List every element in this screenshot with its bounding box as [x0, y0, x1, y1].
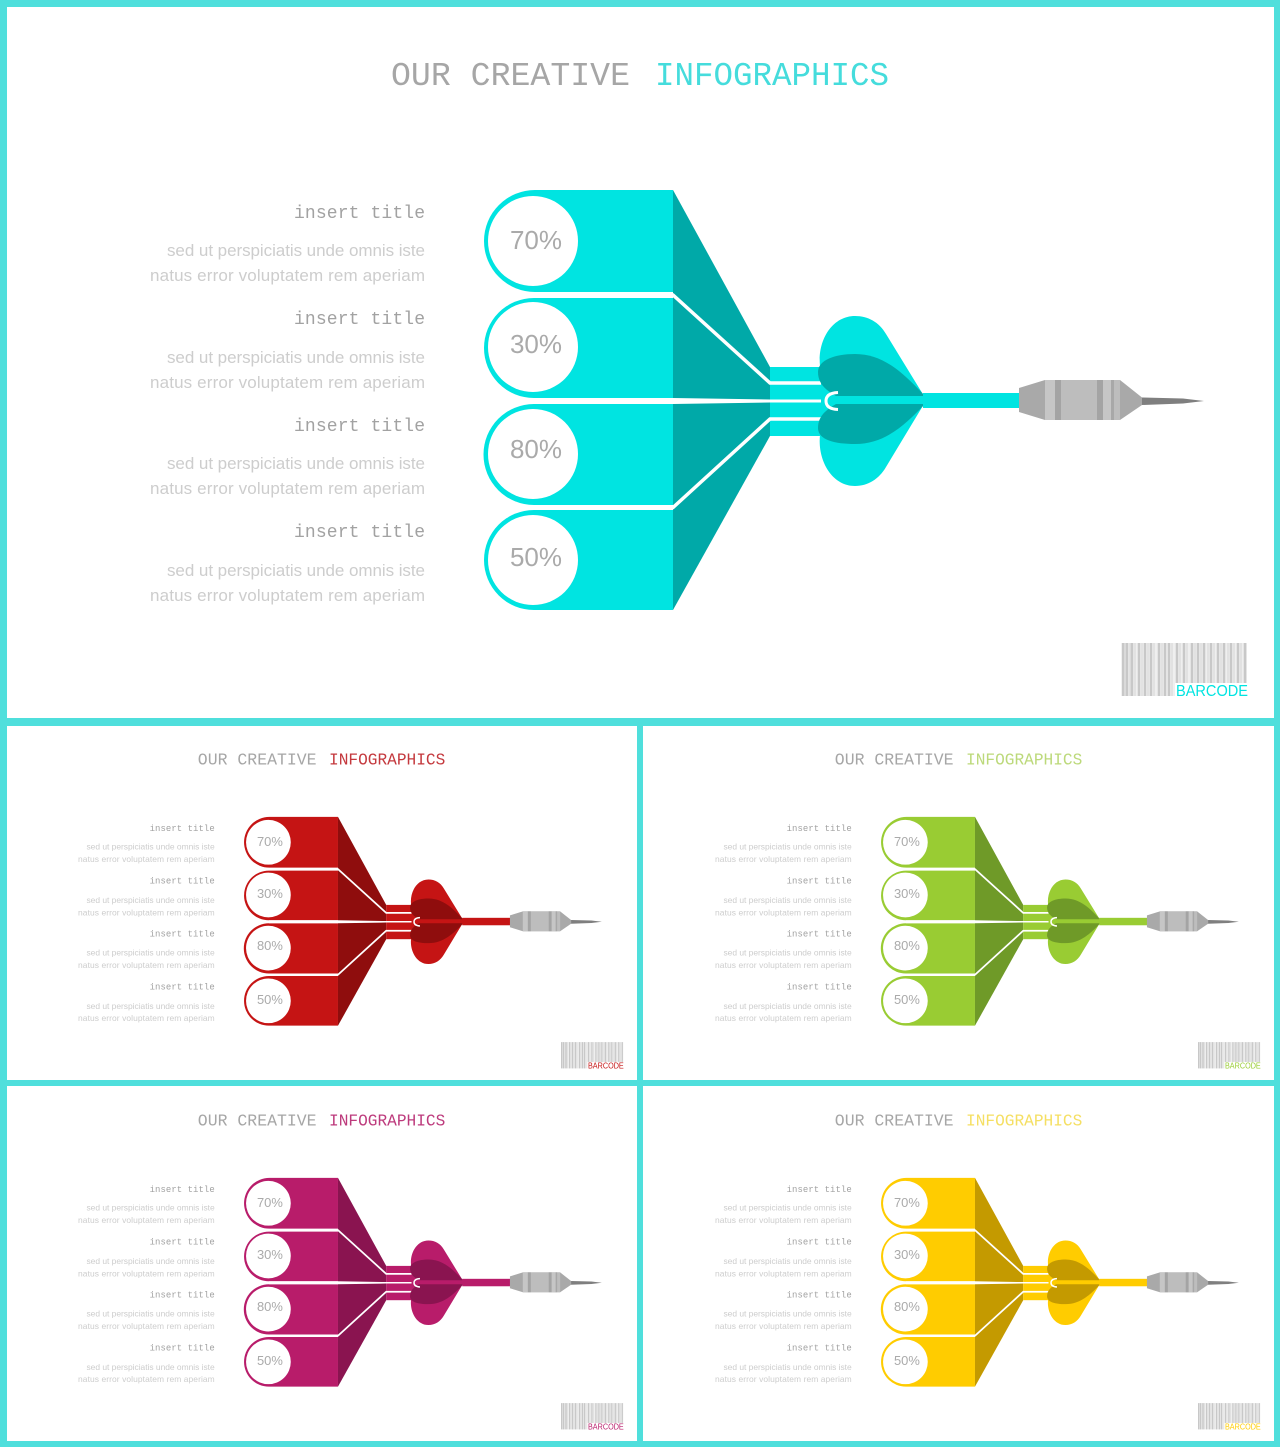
text blocks: natus error voluptatem rem aperiam — [715, 907, 852, 917]
icon: dart barrel and tip — [462, 1272, 602, 1292]
percentages: 30% — [257, 886, 283, 901]
text blocks: natus error voluptatem rem aperiam — [715, 960, 852, 970]
text blocks: natus error voluptatem rem aperiam — [715, 1215, 852, 1225]
percentages: 80% — [894, 1299, 920, 1314]
text blocks: insert title — [787, 1343, 852, 1353]
title — [198, 1112, 445, 1131]
icon: dart barrel and tip — [923, 380, 1204, 420]
text blocks — [78, 1185, 215, 1384]
title: INFOGRAPHICS — [329, 1112, 445, 1131]
icon: dart barrel and tip — [1099, 1272, 1239, 1292]
text blocks: natus error voluptatem rem aperiam — [715, 1268, 852, 1278]
percentages: 50% — [894, 1353, 920, 1368]
title: OUR CREATIVE — [391, 58, 630, 95]
panel: green slide — [643, 726, 1274, 1080]
text blocks: insert title — [787, 824, 852, 834]
text blocks: sed ut perspiciatis unde omnis iste — [86, 1001, 215, 1011]
text blocks: insert title — [787, 1185, 852, 1195]
text block 4: insert title — [294, 523, 425, 543]
four percentage pills — [244, 1178, 338, 1387]
percentages: 70% — [510, 225, 562, 255]
title — [198, 751, 445, 770]
icon: dart flights — [818, 316, 925, 486]
funnel and connector lines — [906, 1178, 1052, 1387]
icon: dart flights — [410, 1241, 463, 1325]
percentages: 50% — [257, 1353, 283, 1368]
barcode — [561, 1042, 624, 1070]
text block 1: sed ut perspiciatis unde omnis iste — [167, 241, 425, 260]
icon: dart flights — [1047, 880, 1100, 964]
icon: dart barrel and tip — [1099, 911, 1239, 931]
title — [835, 1112, 1082, 1131]
percentages — [894, 834, 920, 1007]
text blocks: insert title — [787, 930, 852, 940]
text block 1: insert title — [294, 204, 425, 224]
percentages: 70% — [894, 1195, 920, 1210]
text blocks: insert title — [150, 1238, 215, 1248]
text blocks: natus error voluptatem rem aperiam — [715, 854, 852, 864]
percentages: 50% — [510, 542, 562, 572]
text blocks: natus error voluptatem rem aperiam — [715, 1013, 852, 1023]
percentages: 80% — [510, 434, 562, 464]
percentages — [894, 1195, 920, 1368]
four percentage pills — [483, 190, 673, 610]
text blocks: insert title — [150, 1185, 215, 1195]
text blocks: sed ut perspiciatis unde omnis iste — [86, 1256, 215, 1266]
funnel and connector lines — [534, 190, 828, 610]
title: INFOGRAPHICS — [655, 58, 889, 95]
text block 2 — [150, 310, 425, 392]
text blocks: insert title — [150, 877, 215, 887]
text blocks: insert title — [787, 1291, 852, 1301]
barcode: BARCODE — [588, 1422, 624, 1431]
text block 2: sed ut perspiciatis unde omnis iste — [167, 348, 425, 367]
text block 4: sed ut perspiciatis unde omnis iste — [167, 561, 425, 580]
title: INFOGRAPHICS — [966, 1112, 1082, 1131]
text blocks: sed ut perspiciatis unde omnis iste — [723, 948, 852, 958]
text block 3 — [150, 417, 425, 498]
text blocks: sed ut perspiciatis unde omnis iste — [86, 842, 215, 852]
text block 2: natus error voluptatem rem aperiam — [150, 373, 425, 392]
percentages: 50% — [894, 992, 920, 1007]
text blocks: natus error voluptatem rem aperiam — [715, 1374, 852, 1384]
text blocks: natus error voluptatem rem aperiam — [78, 1321, 215, 1331]
title: OUR CREATIVE — [198, 751, 317, 770]
text block 1 — [150, 204, 425, 285]
text blocks: insert title — [787, 982, 852, 992]
text blocks: natus error voluptatem rem aperiam — [78, 854, 215, 864]
funnel and connector lines — [269, 817, 415, 1026]
percentages: 30% — [894, 1247, 920, 1262]
barcode: BARCODE — [1225, 1422, 1261, 1431]
title: INFOGRAPHICS — [329, 751, 445, 770]
funnel and connector lines — [269, 1178, 415, 1387]
title — [391, 58, 889, 95]
percentages: 70% — [257, 1195, 283, 1210]
text blocks — [715, 1185, 852, 1384]
text blocks: natus error voluptatem rem aperiam — [715, 1321, 852, 1331]
text block 2: insert title — [294, 310, 425, 330]
panel: red slide — [7, 726, 637, 1080]
percentages: 70% — [257, 834, 283, 849]
funnel and connector lines — [906, 817, 1052, 1026]
text blocks: sed ut perspiciatis unde omnis iste — [723, 1203, 852, 1213]
text blocks: sed ut perspiciatis unde omnis iste — [86, 1203, 215, 1213]
barcode — [1122, 643, 1249, 700]
percentages: 30% — [510, 329, 562, 359]
text blocks: sed ut perspiciatis unde omnis iste — [723, 1001, 852, 1011]
title: OUR CREATIVE — [835, 1112, 954, 1131]
text blocks — [78, 824, 215, 1023]
icon: dart flights — [1047, 1241, 1100, 1325]
panel: cyan main slide — [7, 7, 1274, 718]
text blocks: insert title — [150, 930, 215, 940]
text blocks: insert title — [150, 824, 215, 834]
text blocks: natus error voluptatem rem aperiam — [78, 1268, 215, 1278]
text blocks: sed ut perspiciatis unde omnis iste — [86, 948, 215, 958]
text block 4: natus error voluptatem rem aperiam — [150, 586, 425, 605]
text block 4 — [150, 523, 425, 605]
text blocks: sed ut perspiciatis unde omnis iste — [723, 1309, 852, 1319]
percentages: 80% — [894, 938, 920, 953]
text blocks: insert title — [150, 1343, 215, 1353]
barcode: BARCODE — [1176, 683, 1248, 700]
text blocks: natus error voluptatem rem aperiam — [78, 1374, 215, 1384]
percentages: 80% — [257, 1299, 283, 1314]
text blocks: natus error voluptatem rem aperiam — [78, 960, 215, 970]
text blocks: insert title — [150, 982, 215, 992]
text blocks: insert title — [150, 1291, 215, 1301]
text block 3: insert title — [294, 417, 425, 437]
four percentage pills — [881, 817, 975, 1026]
barcode — [1198, 1042, 1261, 1070]
text blocks: sed ut perspiciatis unde omnis iste — [86, 895, 215, 905]
text blocks: natus error voluptatem rem aperiam — [78, 1013, 215, 1023]
percentages: 70% — [894, 834, 920, 849]
text blocks: sed ut perspiciatis unde omnis iste — [723, 1256, 852, 1266]
four percentage pills — [881, 1178, 975, 1387]
text blocks: sed ut perspiciatis unde omnis iste — [86, 1309, 215, 1319]
icon: dart barrel and tip — [462, 911, 602, 931]
text block 3: natus error voluptatem rem aperiam — [150, 479, 425, 498]
title: INFOGRAPHICS — [966, 751, 1082, 770]
text blocks: natus error voluptatem rem aperiam — [78, 907, 215, 917]
text blocks: sed ut perspiciatis unde omnis iste — [86, 1362, 215, 1372]
title: OUR CREATIVE — [198, 1112, 317, 1131]
barcode — [1198, 1403, 1261, 1431]
panel: yellow slide — [643, 1086, 1274, 1441]
text blocks: sed ut perspiciatis unde omnis iste — [723, 1362, 852, 1372]
text blocks: sed ut perspiciatis unde omnis iste — [723, 895, 852, 905]
barcode: BARCODE — [588, 1061, 624, 1070]
percentages: 30% — [894, 886, 920, 901]
four percentage pills — [244, 817, 338, 1026]
text blocks — [715, 824, 852, 1023]
text blocks: insert title — [787, 1238, 852, 1248]
title: OUR CREATIVE — [835, 751, 954, 770]
text blocks: sed ut perspiciatis unde omnis iste — [723, 842, 852, 852]
text blocks: insert title — [787, 877, 852, 887]
icon: dart flights — [410, 880, 463, 964]
barcode — [561, 1403, 624, 1431]
text block 3: sed ut perspiciatis unde omnis iste — [167, 454, 425, 473]
title — [835, 751, 1082, 770]
text block 1: natus error voluptatem rem aperiam — [150, 266, 425, 285]
percentages — [510, 225, 562, 572]
percentages — [257, 834, 283, 1007]
percentages: 30% — [257, 1247, 283, 1262]
percentages — [257, 1195, 283, 1368]
percentages: 80% — [257, 938, 283, 953]
percentages: 50% — [257, 992, 283, 1007]
text blocks: natus error voluptatem rem aperiam — [78, 1215, 215, 1225]
barcode: BARCODE — [1225, 1061, 1261, 1070]
panel: magenta slide — [7, 1086, 637, 1441]
